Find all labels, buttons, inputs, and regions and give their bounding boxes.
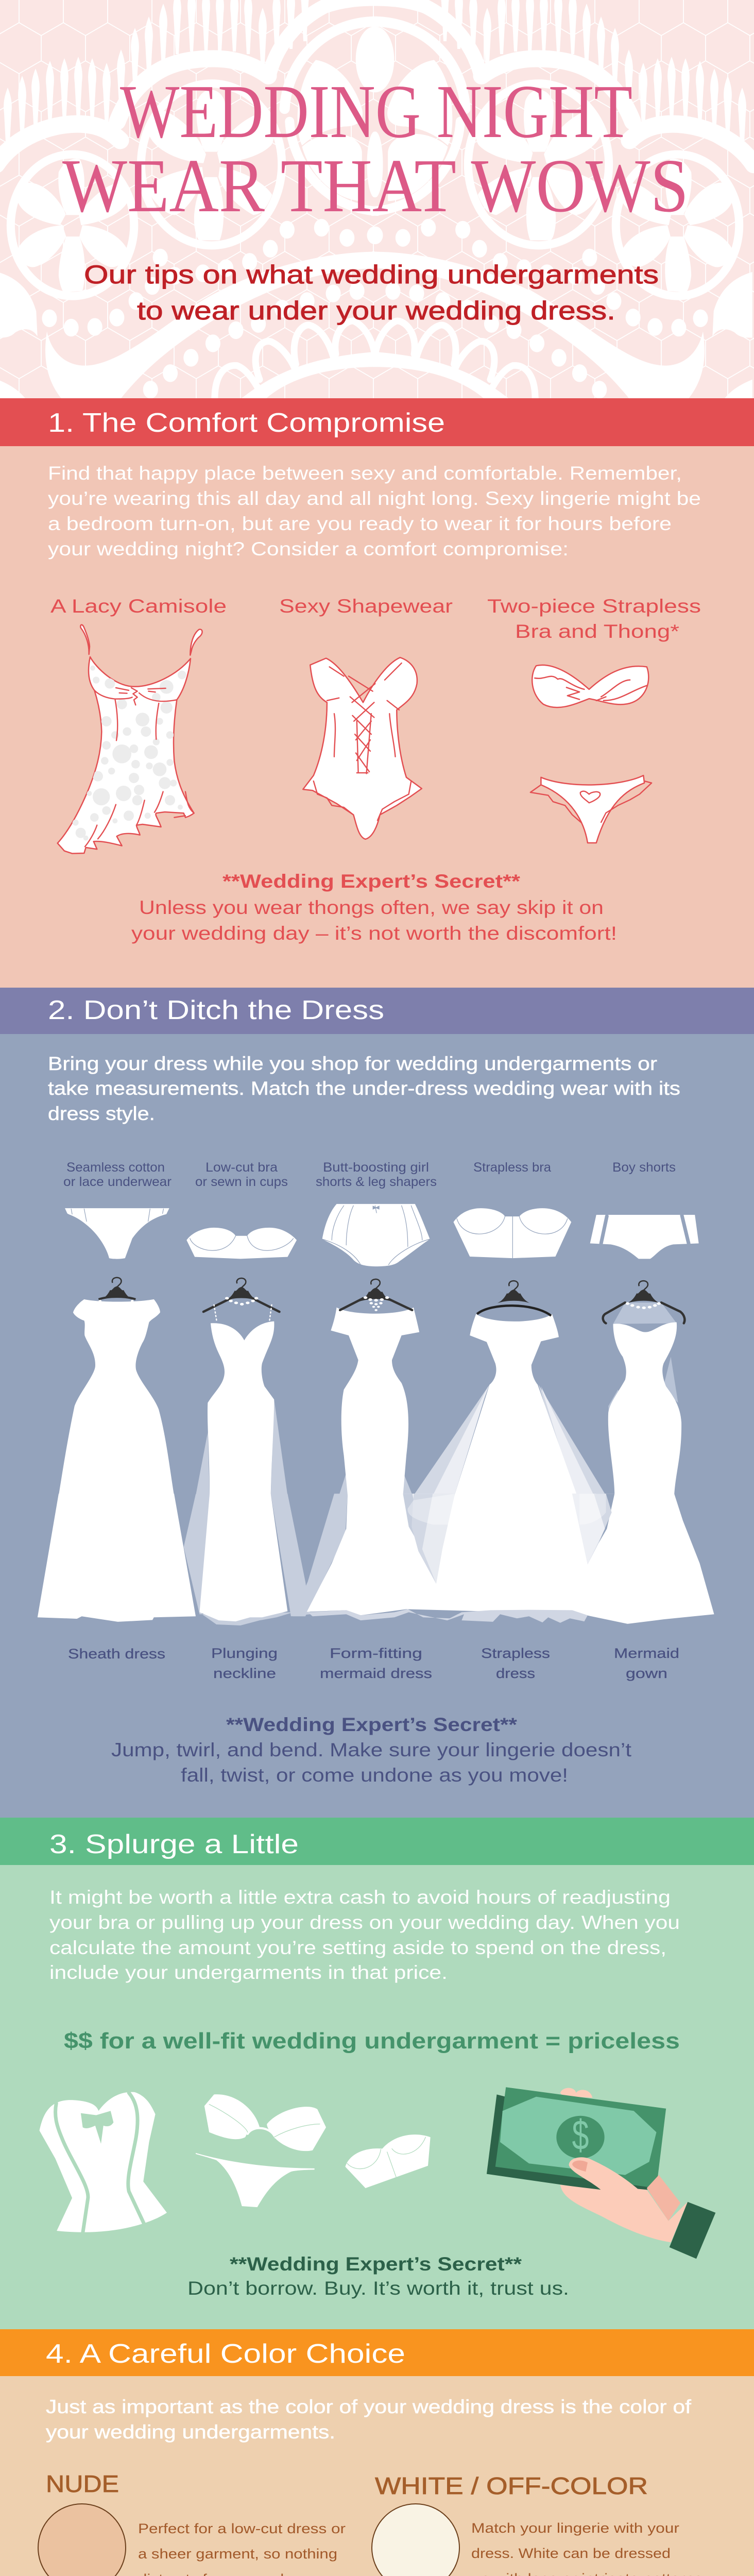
expert secret 1 bbox=[131, 871, 617, 944]
garment labels bbox=[50, 596, 701, 642]
illustration: hand holding cash: $ bbox=[572, 2112, 589, 2159]
undergarment labels: Butt-boosting girl bbox=[323, 1160, 429, 1175]
expert secret 3: **Wedding Expert’s Secret** bbox=[230, 2253, 522, 2275]
illustration: corset bbox=[40, 2092, 167, 2233]
illustration: sexy shapewear bbox=[303, 657, 422, 839]
section 2 heading bbox=[0, 988, 754, 1034]
section 1 heading bbox=[0, 398, 754, 446]
section 3 heading: 3. Splurge a Little bbox=[49, 1829, 299, 1859]
dress names: Plunging bbox=[211, 1646, 278, 1661]
expert secret 1: **Wedding Expert’s Secret** bbox=[222, 871, 521, 892]
dress names: neckline bbox=[213, 1666, 276, 1681]
garment labels: Sexy Shapewear bbox=[279, 596, 453, 617]
section 2 intro text bbox=[48, 1053, 680, 1124]
section 2 intro text: take measurements. Match the under-dress wedding wear with its bbox=[48, 1078, 680, 1099]
illustration: lacy camisole bbox=[58, 625, 202, 854]
undergarment labels: or lace underwear bbox=[63, 1175, 172, 1189]
dress 1: sheath with hanger bbox=[38, 1278, 196, 1622]
panel: 4. A Careful Color Choice bbox=[0, 2329, 754, 2576]
section 3 intro text: calculate the amount you’re setting aside to spend on the dress, bbox=[49, 1937, 666, 1958]
illustration: small strapless bra bbox=[345, 2134, 431, 2188]
dress names: Form-fitting bbox=[330, 1646, 422, 1661]
undergarment illustrations bbox=[65, 1204, 699, 1266]
section 3 intro text: your bra or pulling up your dress on your wedding day. When you bbox=[49, 1912, 680, 1933]
dress 4: strapless ball gown with hanger bbox=[307, 1281, 714, 1624]
section 3 intro text: include your undergarments in that price. bbox=[49, 1962, 448, 1983]
garment labels: Two-piece Strapless bbox=[487, 596, 701, 617]
dress 5: mermaid gown with hanger bbox=[603, 1281, 684, 1496]
expert secret 2: **Wedding Expert’s Secret** bbox=[226, 1714, 518, 1735]
section 4 heading bbox=[0, 2329, 754, 2376]
section 4 intro text bbox=[46, 2396, 692, 2443]
nude swatch and text: Perfect for a low-cut dress or bbox=[138, 2521, 346, 2536]
illustration: thong bbox=[530, 775, 652, 843]
expert secret 3 bbox=[187, 2253, 569, 2299]
section 1 intro text: Find that happy place between sexy and comfortable. Remember, bbox=[48, 463, 682, 484]
section 1 heading: 1. The Comfort Compromise bbox=[48, 408, 445, 438]
section 3 intro text: It might be worth a little extra cash to avoid hours of readjusting bbox=[49, 1887, 671, 1908]
section 3 intro text bbox=[49, 1887, 680, 1983]
expert secret 3: Don’t borrow. Buy. It’s worth it, trust us. bbox=[187, 2278, 569, 2299]
subtitle bbox=[84, 260, 659, 325]
expert secret 1: your wedding day – it’s not worth the discomfort! bbox=[131, 923, 617, 944]
subtitle: Our tips on what wedding undergarments bbox=[84, 260, 659, 289]
title: WEDDING NIGHT bbox=[120, 70, 632, 154]
undergarment labels: or sewn in cups bbox=[195, 1175, 288, 1189]
section 4 intro text: your wedding undergarments. bbox=[46, 2421, 335, 2443]
undergarment labels: Seamless cotton bbox=[66, 1160, 165, 1175]
section 1 intro text bbox=[48, 463, 701, 560]
priceless callout: $$ for a well-fit wedding undergarment = priceless bbox=[64, 2028, 680, 2054]
undergarment labels: Strapless bra bbox=[473, 1160, 551, 1175]
undergarment labels: Boy shorts bbox=[612, 1160, 676, 1175]
white swatch and text: dress. White can be dressed bbox=[471, 2546, 671, 2561]
panel: 2. Don't Ditch the Dress bbox=[0, 988, 754, 1818]
white swatch and text bbox=[372, 2472, 707, 2576]
expert secret 2: Jump, twirl, and bend. Make sure your lingerie doesn’t bbox=[111, 1739, 632, 1760]
panel: 1. The Comfort Compromise bbox=[0, 398, 754, 988]
section 1 intro text: your wedding night? Consider a comfort compromise: bbox=[48, 538, 569, 560]
white swatch and text: Match your lingerie with your bbox=[471, 2520, 679, 2536]
expert secret 1: Unless you wear thongs often, we say skip it on bbox=[139, 897, 604, 918]
section 3 heading bbox=[0, 1818, 754, 1865]
dress names: Mermaid bbox=[614, 1646, 679, 1661]
dress names: Sheath dress bbox=[68, 1646, 165, 1662]
dress 3: form-fitting mermaid with hanger bbox=[331, 1279, 419, 1496]
panel: 3. Splurge a Little bbox=[0, 1818, 754, 2329]
nude swatch and text: a sheer garment, so nothing bbox=[138, 2546, 337, 2562]
expert secret 2 bbox=[111, 1714, 632, 1786]
illustration: hand holding cash bbox=[487, 2087, 715, 2259]
section 1 intro text: a bedroom turn-on, but are you ready to wear it for hours before bbox=[48, 513, 672, 534]
section 4 heading: 4. A Careful Color Choice bbox=[46, 2339, 405, 2369]
undergarment labels: Low-cut bra bbox=[205, 1160, 278, 1175]
dress names: Strapless bbox=[481, 1646, 550, 1661]
section 2 intro text: Bring your dress while you shop for wedding undergarments or bbox=[48, 1053, 657, 1074]
dress names: dress bbox=[496, 1666, 535, 1681]
section 2 intro text: dress style. bbox=[48, 1103, 155, 1124]
section 1 intro text: you’re wearing this all day and all night long. Sexy lingerie might be bbox=[48, 488, 701, 509]
nude swatch and text bbox=[38, 2470, 346, 2576]
section 4 intro text: Just as important as the color of your wedding dress is the color of bbox=[46, 2396, 692, 2417]
garment labels: Bra and Thong* bbox=[515, 621, 679, 642]
undergarment labels: shorts & leg shapers bbox=[316, 1175, 437, 1189]
title bbox=[62, 70, 689, 228]
garment labels: A Lacy Camisole bbox=[50, 596, 227, 617]
section 2 heading: 2. Don’t Ditch the Dress bbox=[48, 995, 384, 1025]
white swatch and text: WHITE / OFF-COLOR bbox=[375, 2472, 648, 2499]
undergarment labels bbox=[63, 1160, 676, 1189]
illustration: bra and thong bbox=[196, 2094, 326, 2207]
expert secret 2: fall, twist, or come undone as you move! bbox=[181, 1765, 568, 1786]
illustration: strapless bra bbox=[532, 665, 648, 707]
header lace background bbox=[0, 0, 754, 400]
subtitle: to wear under your wedding dress. bbox=[137, 296, 615, 325]
title: WEAR THAT WOWS bbox=[62, 144, 689, 228]
dress names bbox=[68, 1646, 679, 1681]
dress names: gown bbox=[626, 1666, 667, 1681]
dress names: mermaid dress bbox=[320, 1666, 432, 1681]
dress 2: plunging neckline with hanger bbox=[184, 1278, 348, 1625]
nude swatch and text: NUDE bbox=[46, 2470, 119, 2497]
